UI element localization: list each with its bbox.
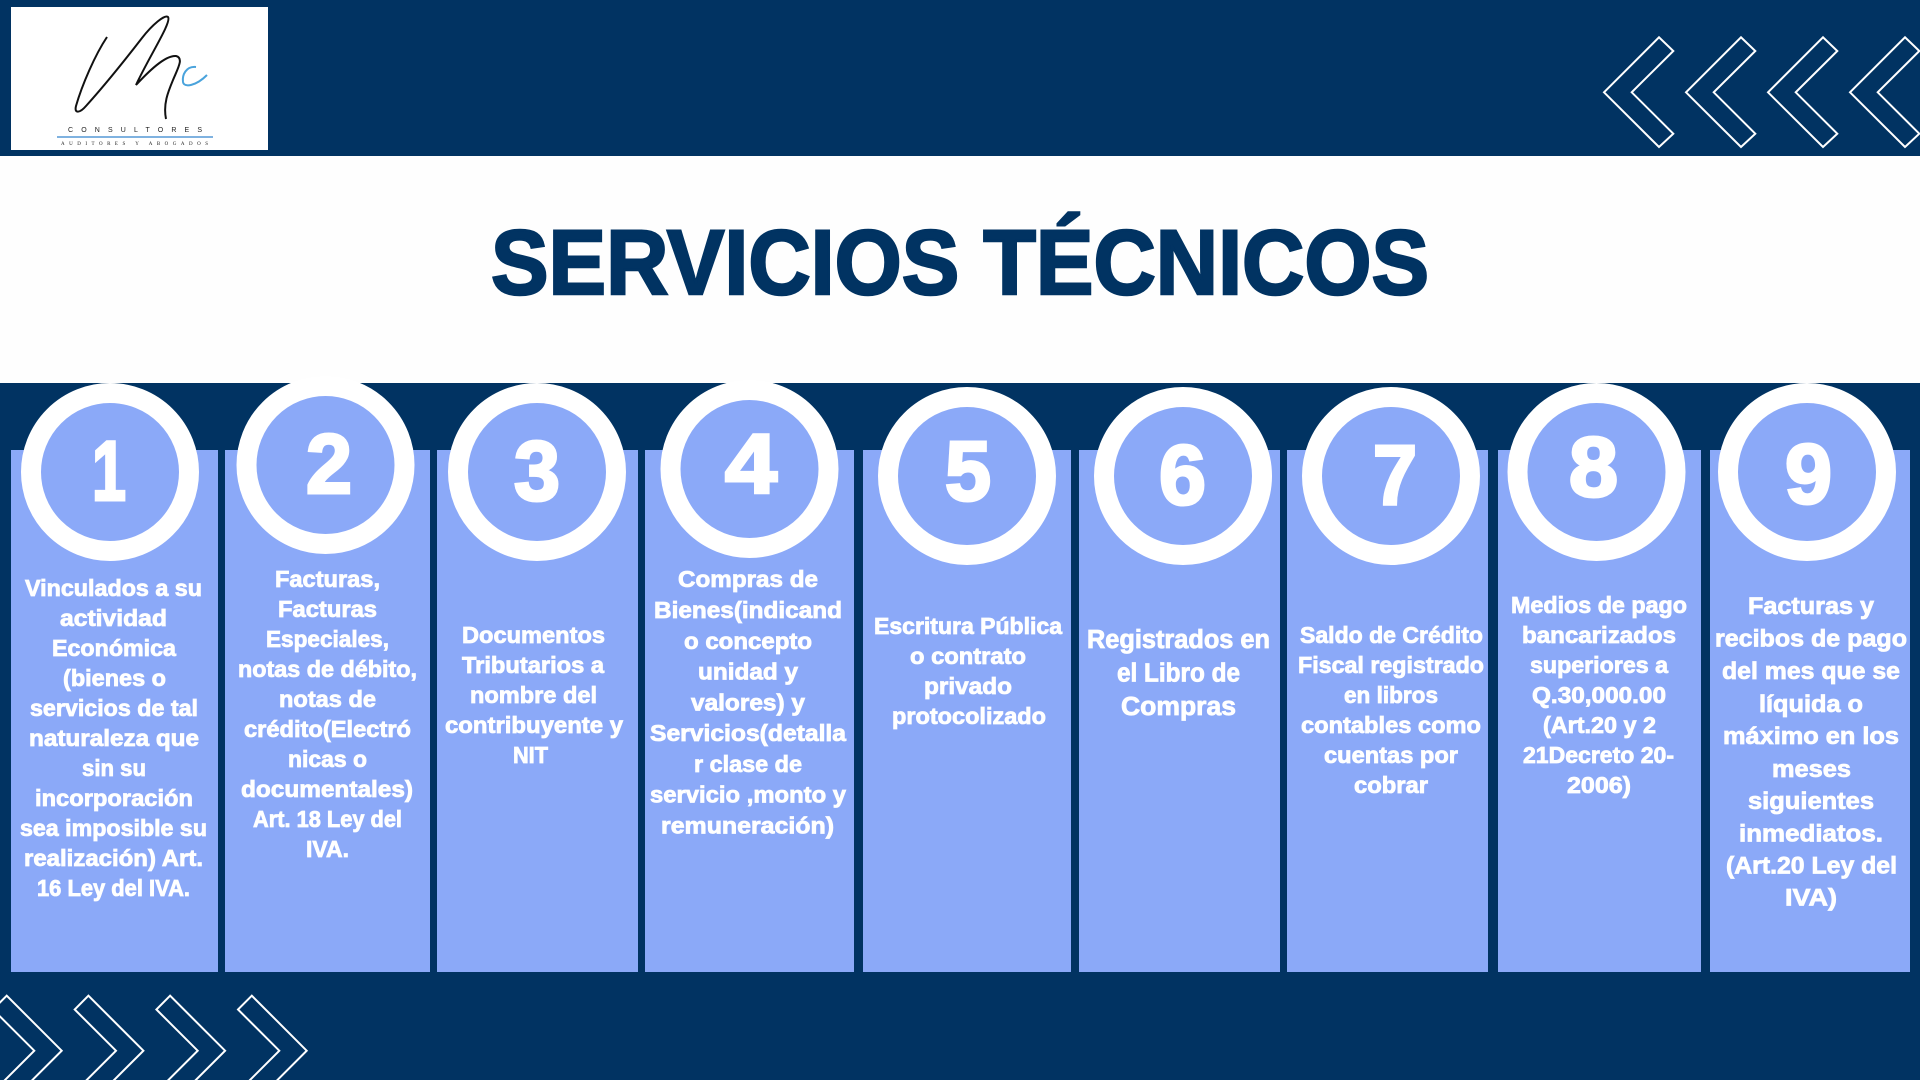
logo: CONSULTORES [68,127,202,134]
text block 7: contables como [1301,712,1481,738]
text block 9 [1715,593,1907,912]
title band [0,156,1920,383]
text block 1: sin su [82,755,146,781]
text block 9: máximo en los [1723,723,1899,750]
text block 4: unidad y [698,658,798,684]
text block 3: NIT [513,742,548,768]
text block 6: Compras [1121,693,1236,721]
text block 3: Documentos [462,622,605,648]
panel 2: 2 [306,417,352,511]
text block 3 [445,622,623,768]
text block 5: Escritura Pública [874,613,1062,639]
panel 5: 5 [945,424,991,518]
text block 9: líquida o [1759,691,1863,718]
panel 2 [225,386,430,972]
panel 1: 1 [92,424,126,518]
text block 9: recibos de pago [1715,625,1907,652]
text block 1: Vinculados a su [25,575,202,601]
text block 2: crédito(Electró [244,716,411,742]
text block 5 [874,613,1062,729]
text block 3: Tributarios a [462,652,604,678]
text block 8: Q.30,000.00 [1532,682,1666,708]
text block 2: nicas o [288,746,367,772]
panel 1 [11,393,218,972]
text block 1: servicios de tal [30,695,198,721]
text block 9: del mes que se [1722,658,1900,685]
panel 5 [863,397,1071,972]
panel 4 [645,390,854,972]
text block 4: remuneración) [661,812,834,838]
text block 1: sea imposible su [20,815,207,841]
panel 3 [437,393,638,972]
logo: AUDITORES Y ABOGADOS [61,142,208,147]
text block 9: Facturas y [1748,593,1874,620]
text block 4: Servicios(detalla [650,720,846,746]
text block 1: naturaleza que [29,725,199,751]
text block 7: Saldo de Crédito [1300,622,1483,648]
text block 1: incorporación [35,785,193,811]
text block 8: Medios de pago [1511,592,1687,618]
text block 1: realización) Art. [24,845,203,871]
text block 1: 16 Ley del IVA. [37,875,190,901]
panel 7 [1287,397,1488,972]
text block 4: valores) y [691,690,805,716]
panel 3: 3 [514,424,560,518]
panel 9: 9 [1785,427,1832,521]
text block 2: Facturas [278,596,377,622]
text block 1: actividad [60,605,167,631]
text block 8: bancarizados [1522,622,1676,648]
panel 8: 8 [1569,420,1618,514]
text block 2: notas de débito, [238,656,417,682]
text block 6 [1087,626,1270,721]
text block 8: (Art.20 y 2 [1543,712,1656,738]
text block 8: 21Decreto 20- [1523,742,1674,768]
text block 3: contribuyente y [445,712,623,738]
text block 2: Especiales, [266,626,389,652]
text block 4: servicio ,monto y [650,782,846,808]
text block 5: protocolizado [892,703,1046,729]
text block 7: Fiscal registrado [1298,652,1484,678]
text block 6: Registrados en [1087,626,1270,654]
title: SERVICIOS TÉCNICOS [491,212,1429,314]
text block 8: superiores a [1530,652,1668,678]
text block 2: IVA. [306,836,349,862]
text block 9: inmediatos. [1739,820,1883,848]
panel 9 [1710,393,1910,972]
panel 6: 6 [1159,428,1206,522]
text block 4 [650,566,846,838]
text block 7: cuentas por [1324,742,1458,768]
text block 9: (Art.20 Ley del [1726,852,1897,880]
chevron arrows top right [1604,37,1919,147]
panel 8 [1498,393,1701,972]
text block 9: meses [1772,756,1851,783]
text block 9: siguientes [1748,788,1874,815]
text block 5: privado [924,673,1012,699]
logo [11,7,268,150]
text block 8: 2006) [1567,772,1631,798]
text block 4: o concepto [684,628,812,654]
text block 2: documentales) [241,776,413,802]
text block 2: Facturas, [275,566,380,592]
text block 1: (bienes o [63,665,166,691]
text block 4: r clase de [694,751,802,777]
text block 1: Económica [52,635,176,661]
text block 5: o contrato [910,643,1026,669]
panel 7: 7 [1373,428,1417,522]
panel 4: 4 [725,417,777,511]
text block 2: Art. 18 Ley del [253,806,402,832]
text block 7: cobrar [1354,772,1428,798]
panel 6 [1079,397,1280,972]
text block 3: nombre del [470,682,597,708]
text block 4: Bienes(indicand [654,597,842,623]
text block 8 [1511,592,1687,798]
text block 6: el Libro de [1117,660,1240,688]
text block 7 [1298,622,1484,798]
chevron arrows bottom left [0,996,307,1080]
text block 2 [238,566,417,862]
text block 1 [20,575,207,901]
text block 7: en libros [1344,682,1438,708]
text block 4: Compras de [678,566,818,592]
text block 2: notas de [279,686,376,712]
text block 9: IVA) [1785,885,1837,912]
